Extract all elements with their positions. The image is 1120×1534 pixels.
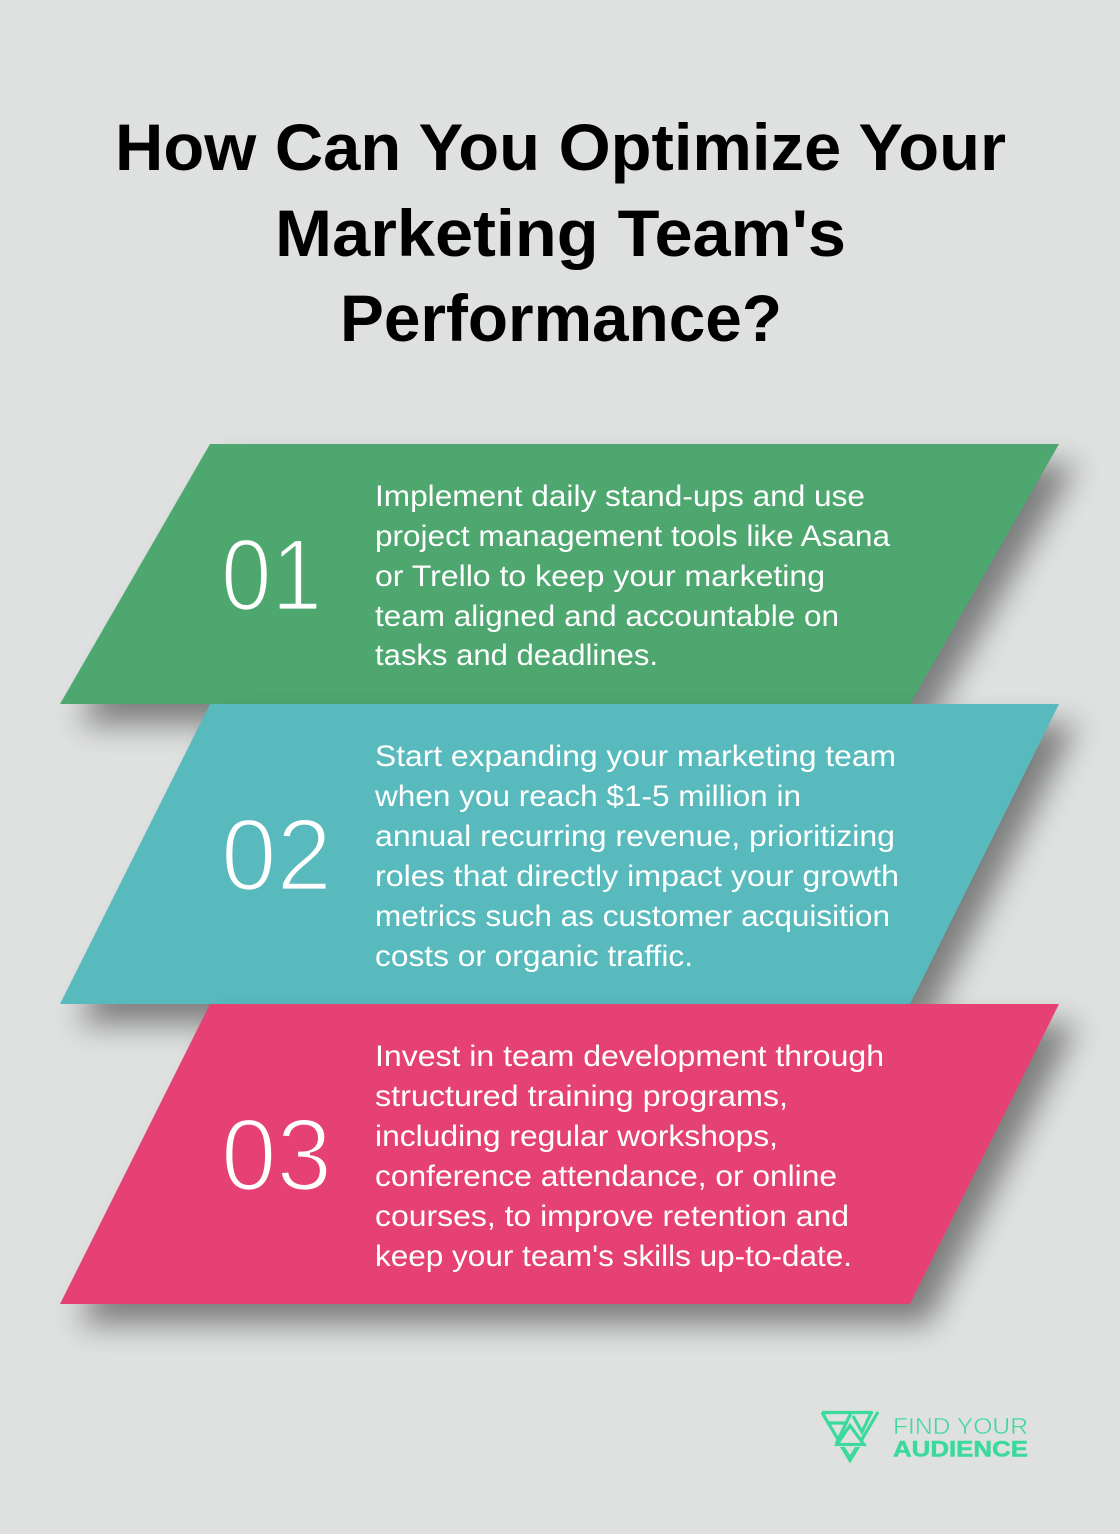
number 02: 02: [221, 798, 332, 912]
text: step 1: [375, 480, 890, 672]
text: step 3: conference attendance, or online: [375, 1160, 837, 1193]
text: step 2: annual recurring revenue, prioritizing: [375, 820, 895, 853]
text: step 1: Implement daily stand-ups and use: [375, 480, 865, 513]
logo wordmark: [893, 1413, 1028, 1462]
text: step 1: tasks and deadlines.: [375, 639, 658, 672]
title: How Can You Optimize Your: [115, 110, 1006, 184]
logo wordmark: AUDIENCE: [893, 1436, 1028, 1462]
text: step 2: [374, 740, 899, 973]
text: step 3: keep your team's skills up-to-date.: [375, 1240, 852, 1273]
panel: step 1: [60, 444, 1077, 724]
text: step 2: roles that directly impact your growth: [375, 860, 899, 893]
text: step 2: costs or organic traffic.: [375, 940, 693, 973]
text: step 2: Start expanding your marketing team: [375, 740, 896, 773]
text: step 3: [375, 1040, 884, 1273]
logo wordmark: FIND YOUR: [893, 1413, 1028, 1439]
panel: step 3: [60, 1004, 1077, 1324]
title: Marketing Team's: [275, 196, 846, 270]
text: step 1: or Trello to keep your marketing: [375, 560, 825, 593]
text: step 3: courses, to improve retention and: [375, 1200, 849, 1233]
title: [115, 110, 1006, 355]
text: step 3: including regular workshops,: [375, 1120, 778, 1153]
text: step 1: project management tools like Asana: [375, 520, 890, 553]
number 01: 01: [221, 518, 322, 632]
icon: triangle mark: [822, 1412, 878, 1464]
number 03: 03: [221, 1098, 332, 1212]
text: step 3: structured training programs,: [375, 1080, 788, 1113]
text: step 2: when you reach $1-5 million in: [374, 780, 801, 813]
text: step 3: Invest in team development through: [375, 1040, 884, 1073]
text: step 1: team aligned and accountable on: [375, 600, 839, 633]
logo: Find Your Audience: [822, 1412, 1028, 1464]
text: step 2: metrics such as customer acquisition: [375, 900, 890, 933]
title: Performance?: [340, 281, 782, 355]
panel: step 2: [60, 704, 1077, 1024]
